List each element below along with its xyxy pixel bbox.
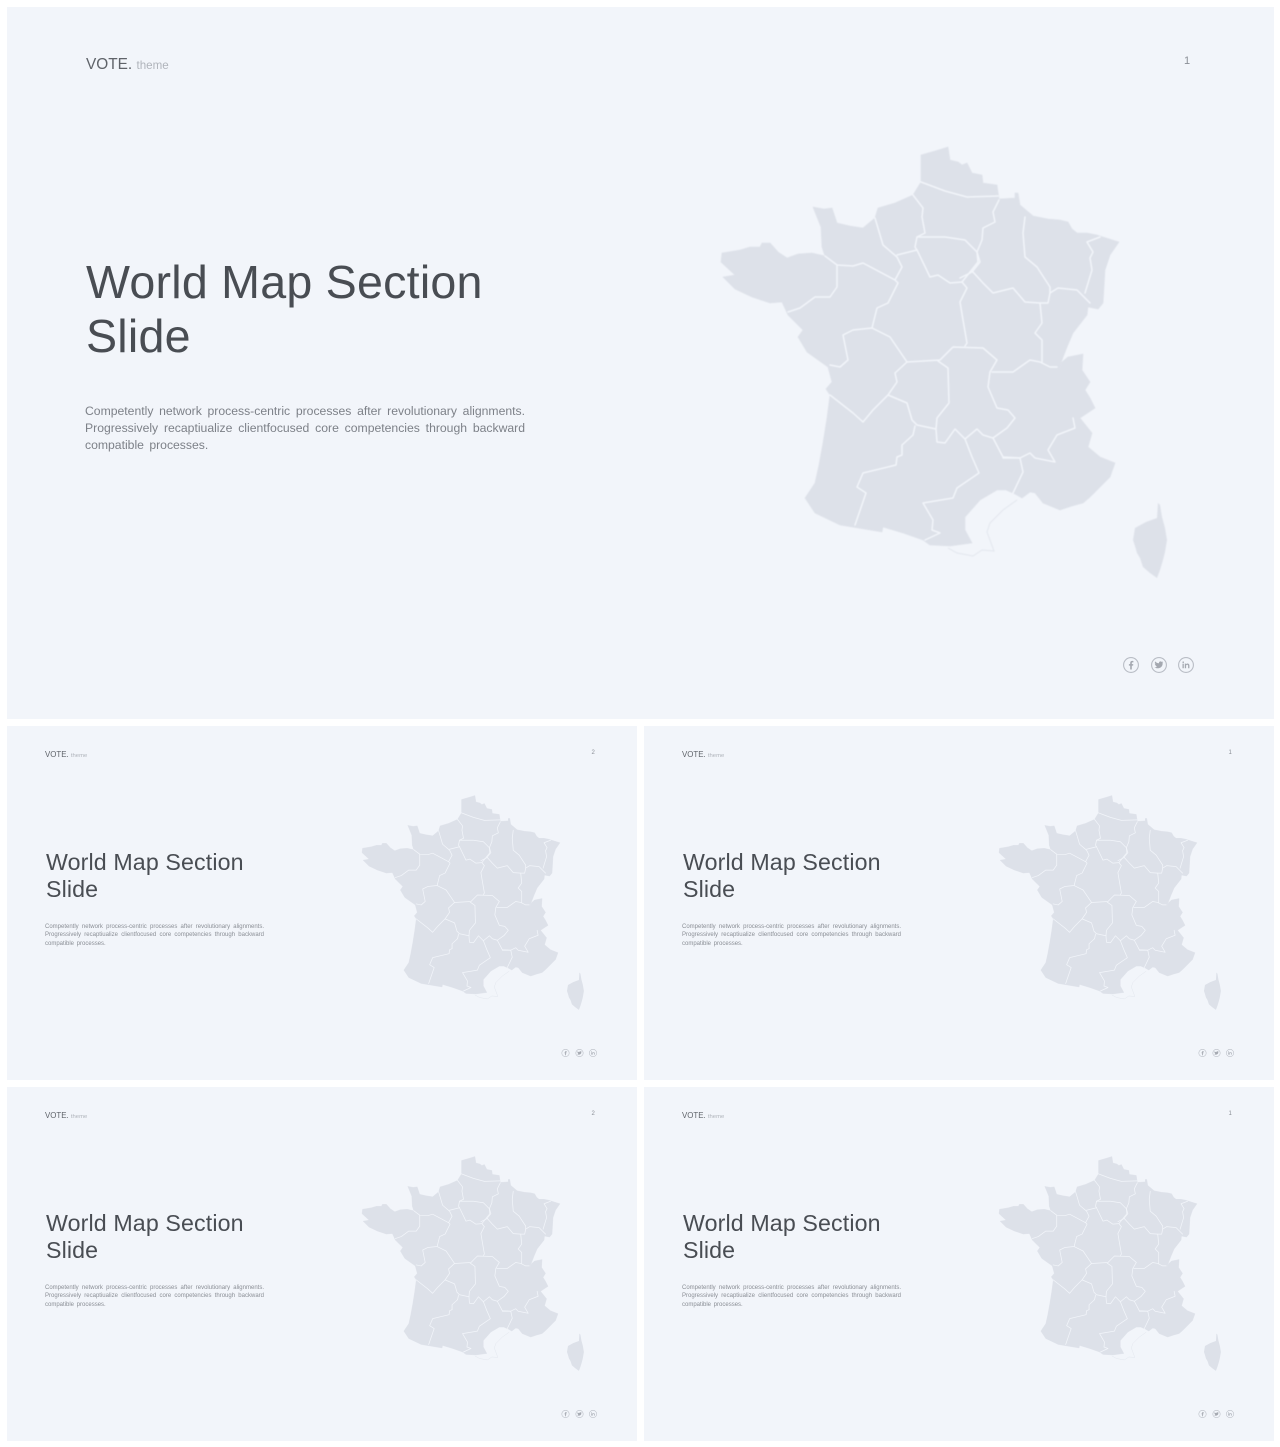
- map of France: [362, 796, 584, 1010]
- map of France: [720, 147, 1167, 578]
- page number: 2: [592, 750, 595, 756]
- page number: 2: [592, 1110, 595, 1116]
- map of France: [362, 1156, 584, 1371]
- heading: Slide: [683, 1237, 735, 1263]
- heading: [683, 1210, 881, 1263]
- page number: 1: [1228, 1110, 1232, 1116]
- text block: [85, 404, 525, 452]
- heading: World Map Section: [46, 849, 244, 875]
- page number: 1: [1184, 55, 1190, 67]
- social icons: [1198, 1049, 1234, 1057]
- heading: Slide: [46, 876, 98, 902]
- text block: Competently network process-centric processes after revolutionary alignments.: [682, 924, 901, 930]
- heading: Slide: [46, 1237, 98, 1263]
- text block: Competently network process-centric processes after revolutionary alignments.: [45, 1284, 264, 1290]
- text block: compatible processes.: [45, 941, 106, 947]
- text block: [682, 1284, 901, 1308]
- heading: [683, 849, 881, 902]
- panel: slide 2: [6, 726, 637, 1080]
- text block: [45, 1284, 264, 1308]
- text block: [45, 924, 264, 947]
- logo: VOTE. theme: [86, 56, 169, 73]
- social icons: [562, 1049, 597, 1057]
- text block: Competently network process-centric processes after revolutionary alignments.: [85, 404, 525, 418]
- heading: World Map Section: [683, 1210, 881, 1236]
- text block: Progressively recaptiualize clientfocused core competencies through backward: [85, 421, 525, 435]
- text block: Competently network process-centric processes after revolutionary alignments.: [682, 1284, 901, 1290]
- text block: compatible processes.: [45, 1302, 106, 1308]
- logo: VOTE. theme: [682, 1111, 724, 1120]
- map of France: [999, 796, 1221, 1010]
- panel: slide 3: [644, 726, 1274, 1080]
- social icons: [1123, 657, 1194, 673]
- heading: World Map Section: [46, 1210, 244, 1236]
- panel: slide 4: [6, 1087, 637, 1441]
- social icons: [562, 1410, 597, 1418]
- social icons: [1198, 1410, 1234, 1418]
- text block: compatible processes.: [682, 1302, 743, 1308]
- heading: World Map Section: [683, 849, 881, 875]
- page number: 1: [1228, 750, 1232, 756]
- heading: Slide: [86, 310, 191, 362]
- text block: Competently network process-centric processes after revolutionary alignments.: [45, 924, 264, 930]
- logo: VOTE. theme: [45, 1111, 87, 1120]
- text block: [682, 924, 901, 947]
- heading: [86, 256, 483, 362]
- logo: VOTE. theme: [682, 750, 724, 759]
- text block: compatible processes.: [85, 438, 208, 452]
- panel: slide 5: [644, 1087, 1274, 1441]
- heading: [46, 1210, 244, 1263]
- text block: Progressively recaptiualize clientfocused core competencies through backward: [682, 1293, 901, 1299]
- text block: Progressively recaptiualize clientfocused core competencies through backward: [45, 932, 264, 938]
- heading: [46, 849, 244, 902]
- map of France: [999, 1156, 1221, 1371]
- panel: main slide: [6, 7, 1274, 719]
- heading: World Map Section: [86, 256, 483, 308]
- text block: Progressively recaptiualize clientfocused core competencies through backward: [682, 932, 901, 938]
- heading: Slide: [683, 876, 735, 902]
- text block: Progressively recaptiualize clientfocused core competencies through backward: [45, 1293, 264, 1299]
- logo: VOTE. theme: [45, 750, 87, 759]
- text block: compatible processes.: [682, 941, 743, 947]
